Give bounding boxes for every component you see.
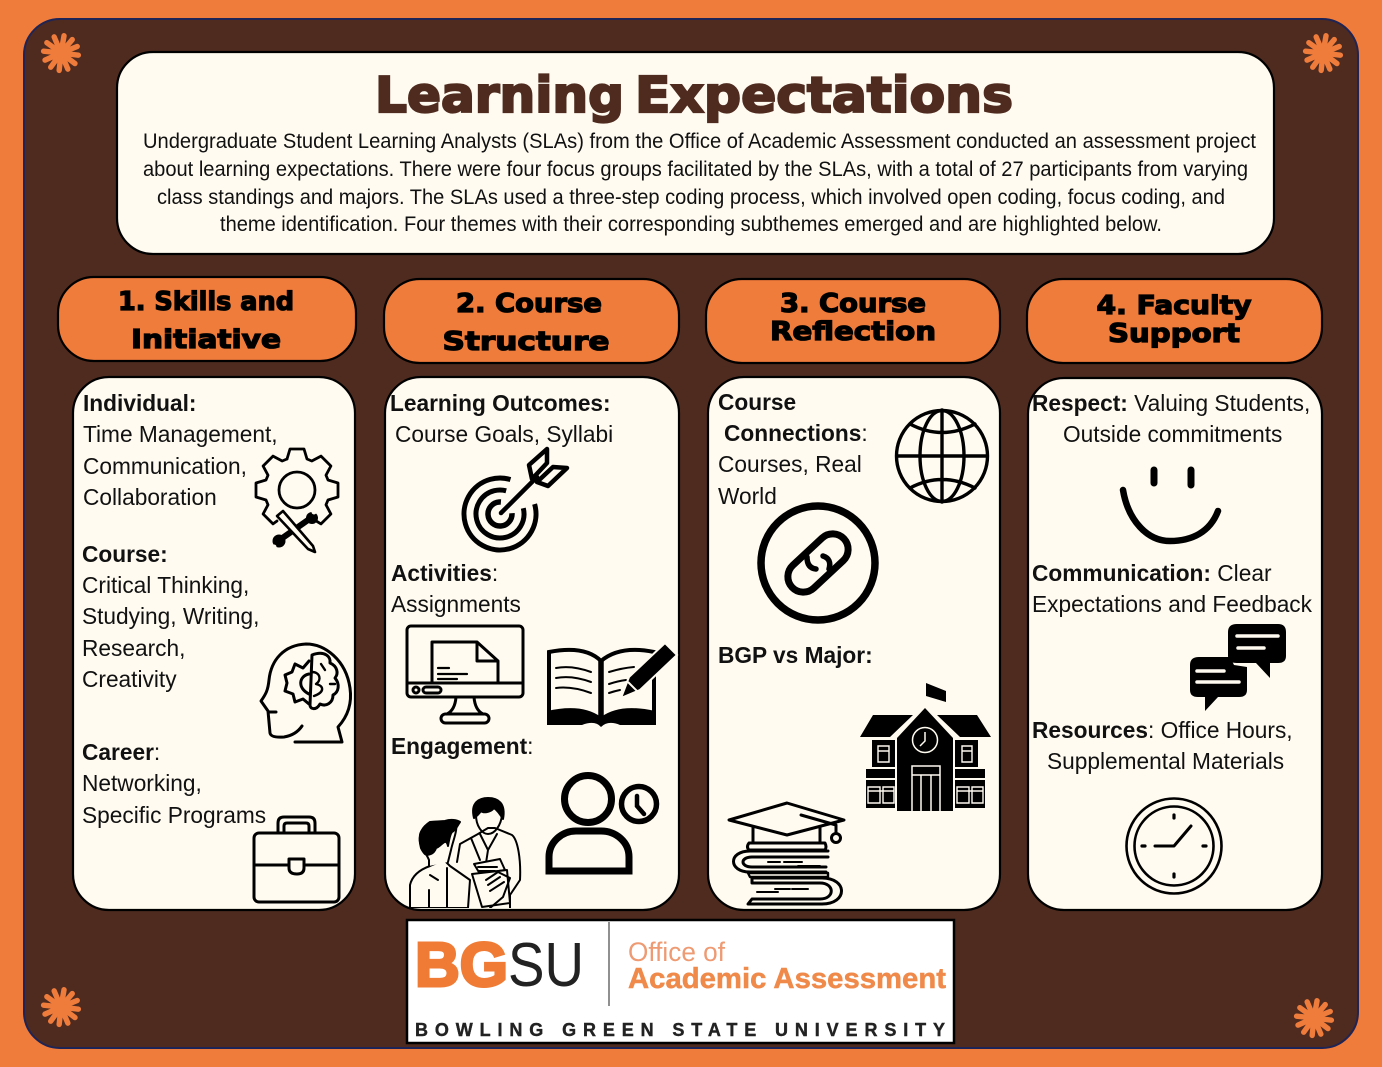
logo: BGSU office of academic assessment: Academic Assessment [628, 963, 946, 995]
icon: chat bubbles [1190, 624, 1286, 711]
intro text: about learning expectations. There were four focus groups facilitated by the SLAs, with a total of 27 participants from varying [143, 158, 1248, 181]
icon: globe [896, 410, 988, 502]
heading: theme 4: 4. Faculty [1096, 291, 1252, 321]
heading: theme 1: 1. Skills and [118, 287, 294, 317]
text: course connections: Course [718, 389, 796, 415]
text: course connections: : [861, 420, 868, 446]
heading: theme 3 [706, 279, 1000, 363]
panel: course reflection [708, 377, 1000, 910]
text: respect: Respect: [1032, 390, 1128, 416]
text: activities: Assignments [391, 591, 521, 617]
intro text [143, 130, 1256, 236]
icon: target and arrow [455, 449, 567, 559]
icon: flower bottom right [1297, 1001, 1331, 1035]
text: respect: Valuing Students, [1128, 390, 1310, 416]
logo: BGSU office of academic assessment [407, 920, 954, 1043]
title: Expectations [635, 67, 1013, 124]
text: activities: : [492, 560, 498, 586]
heading: theme 2 [384, 279, 679, 363]
icon: clock [1126, 798, 1222, 894]
logo: BGSU office of academic assessment: BOWLING GREEN STATE UNIVERSITY [415, 1020, 945, 1040]
title: Learning [375, 67, 624, 124]
heading: theme 4 [1027, 279, 1322, 363]
text: course connections: Courses, Real [718, 451, 862, 477]
text: career: Career [82, 739, 154, 765]
text: course connections: Connections [724, 420, 861, 446]
text: course: Creativity [82, 666, 177, 692]
text: BGP vs major: BGP vs Major: [718, 642, 873, 668]
heading: theme 3: 3. Course [780, 289, 926, 319]
panel: faculty support [1028, 378, 1322, 910]
text: course: Studying, Writing, [82, 603, 259, 629]
text: resources: Supplemental Materials [1047, 748, 1284, 774]
text: resources: Resources [1032, 717, 1148, 743]
logo: BGSU office of academic assessment: SU [508, 931, 584, 1000]
icon: computer monitor [407, 626, 523, 723]
text: learning outcomes: Learning Outcomes: [390, 390, 611, 416]
icon: flower top right [1306, 36, 1340, 70]
panel: course structure [385, 377, 679, 910]
title [375, 67, 1013, 124]
text: resources: : Office Hours, [1148, 717, 1293, 743]
text: career: : [154, 739, 160, 765]
logo: BGSU office of academic assessment: Office of [628, 937, 725, 967]
heading: theme 2: Structure [442, 327, 610, 357]
icon: head with brain [261, 644, 351, 742]
heading: theme 3: Reflection [770, 317, 936, 347]
text: career: Specific Programs [82, 802, 266, 828]
text: communication: Clear [1211, 560, 1272, 586]
icon: smiley face [1123, 470, 1218, 541]
text: course connections: World [718, 483, 777, 509]
text: communication: Communication: [1032, 560, 1211, 586]
text: course: Critical Thinking, [82, 572, 249, 598]
icon: gear and tools [256, 449, 338, 553]
heading: theme 4: Support [1108, 319, 1240, 349]
icon: flower top left [44, 36, 78, 70]
heading: theme 2: 2. Course [456, 289, 602, 319]
text: individual: Communication, [83, 453, 247, 479]
icon: briefcase [254, 817, 339, 902]
icon: chain link in circle [761, 506, 875, 620]
heading: theme 1: Initiative [131, 325, 281, 355]
icon: flower bottom left [44, 990, 78, 1024]
icon: person with clock [549, 776, 656, 871]
text: career: Networking, [82, 770, 202, 796]
text: individual: Time Management, [83, 421, 278, 447]
text: engagement: Engagement [391, 733, 528, 759]
text: course: Research, [82, 635, 185, 661]
text: individual: Collaboration [83, 484, 217, 510]
text: activities: Activities [391, 560, 492, 586]
heading: theme 1 [58, 277, 356, 361]
text: individual: Individual: [83, 390, 196, 416]
intro text: Undergraduate Student Learning Analysts (SLAs) from the Office of Academic Assessment conducted an assessment project [143, 130, 1256, 153]
icon: open book and pencil [547, 643, 677, 727]
intro text: class standings and majors. The SLAs used a three-step coding process, which involved open coding, focus coding, and [157, 186, 1225, 209]
panel: skills and initiative [73, 377, 355, 910]
icon: school building [860, 683, 991, 811]
logo: BGSU office of academic assessment: BG [415, 931, 508, 1000]
text: engagement: : [527, 733, 533, 759]
text: communication: Expectations and Feedback [1032, 591, 1313, 617]
text: learning outcomes: Course Goals, Syllabi [395, 421, 613, 447]
text: course: Course: [82, 541, 168, 567]
intro text: theme identification. Four themes with their corresponding subthemes emerged and are highlighted below. [220, 213, 1162, 236]
icon: graduation cap on books [729, 803, 844, 904]
icon: two people talking [410, 798, 520, 908]
text: respect: Outside commitments [1063, 421, 1282, 447]
panel: introduction [117, 52, 1274, 254]
